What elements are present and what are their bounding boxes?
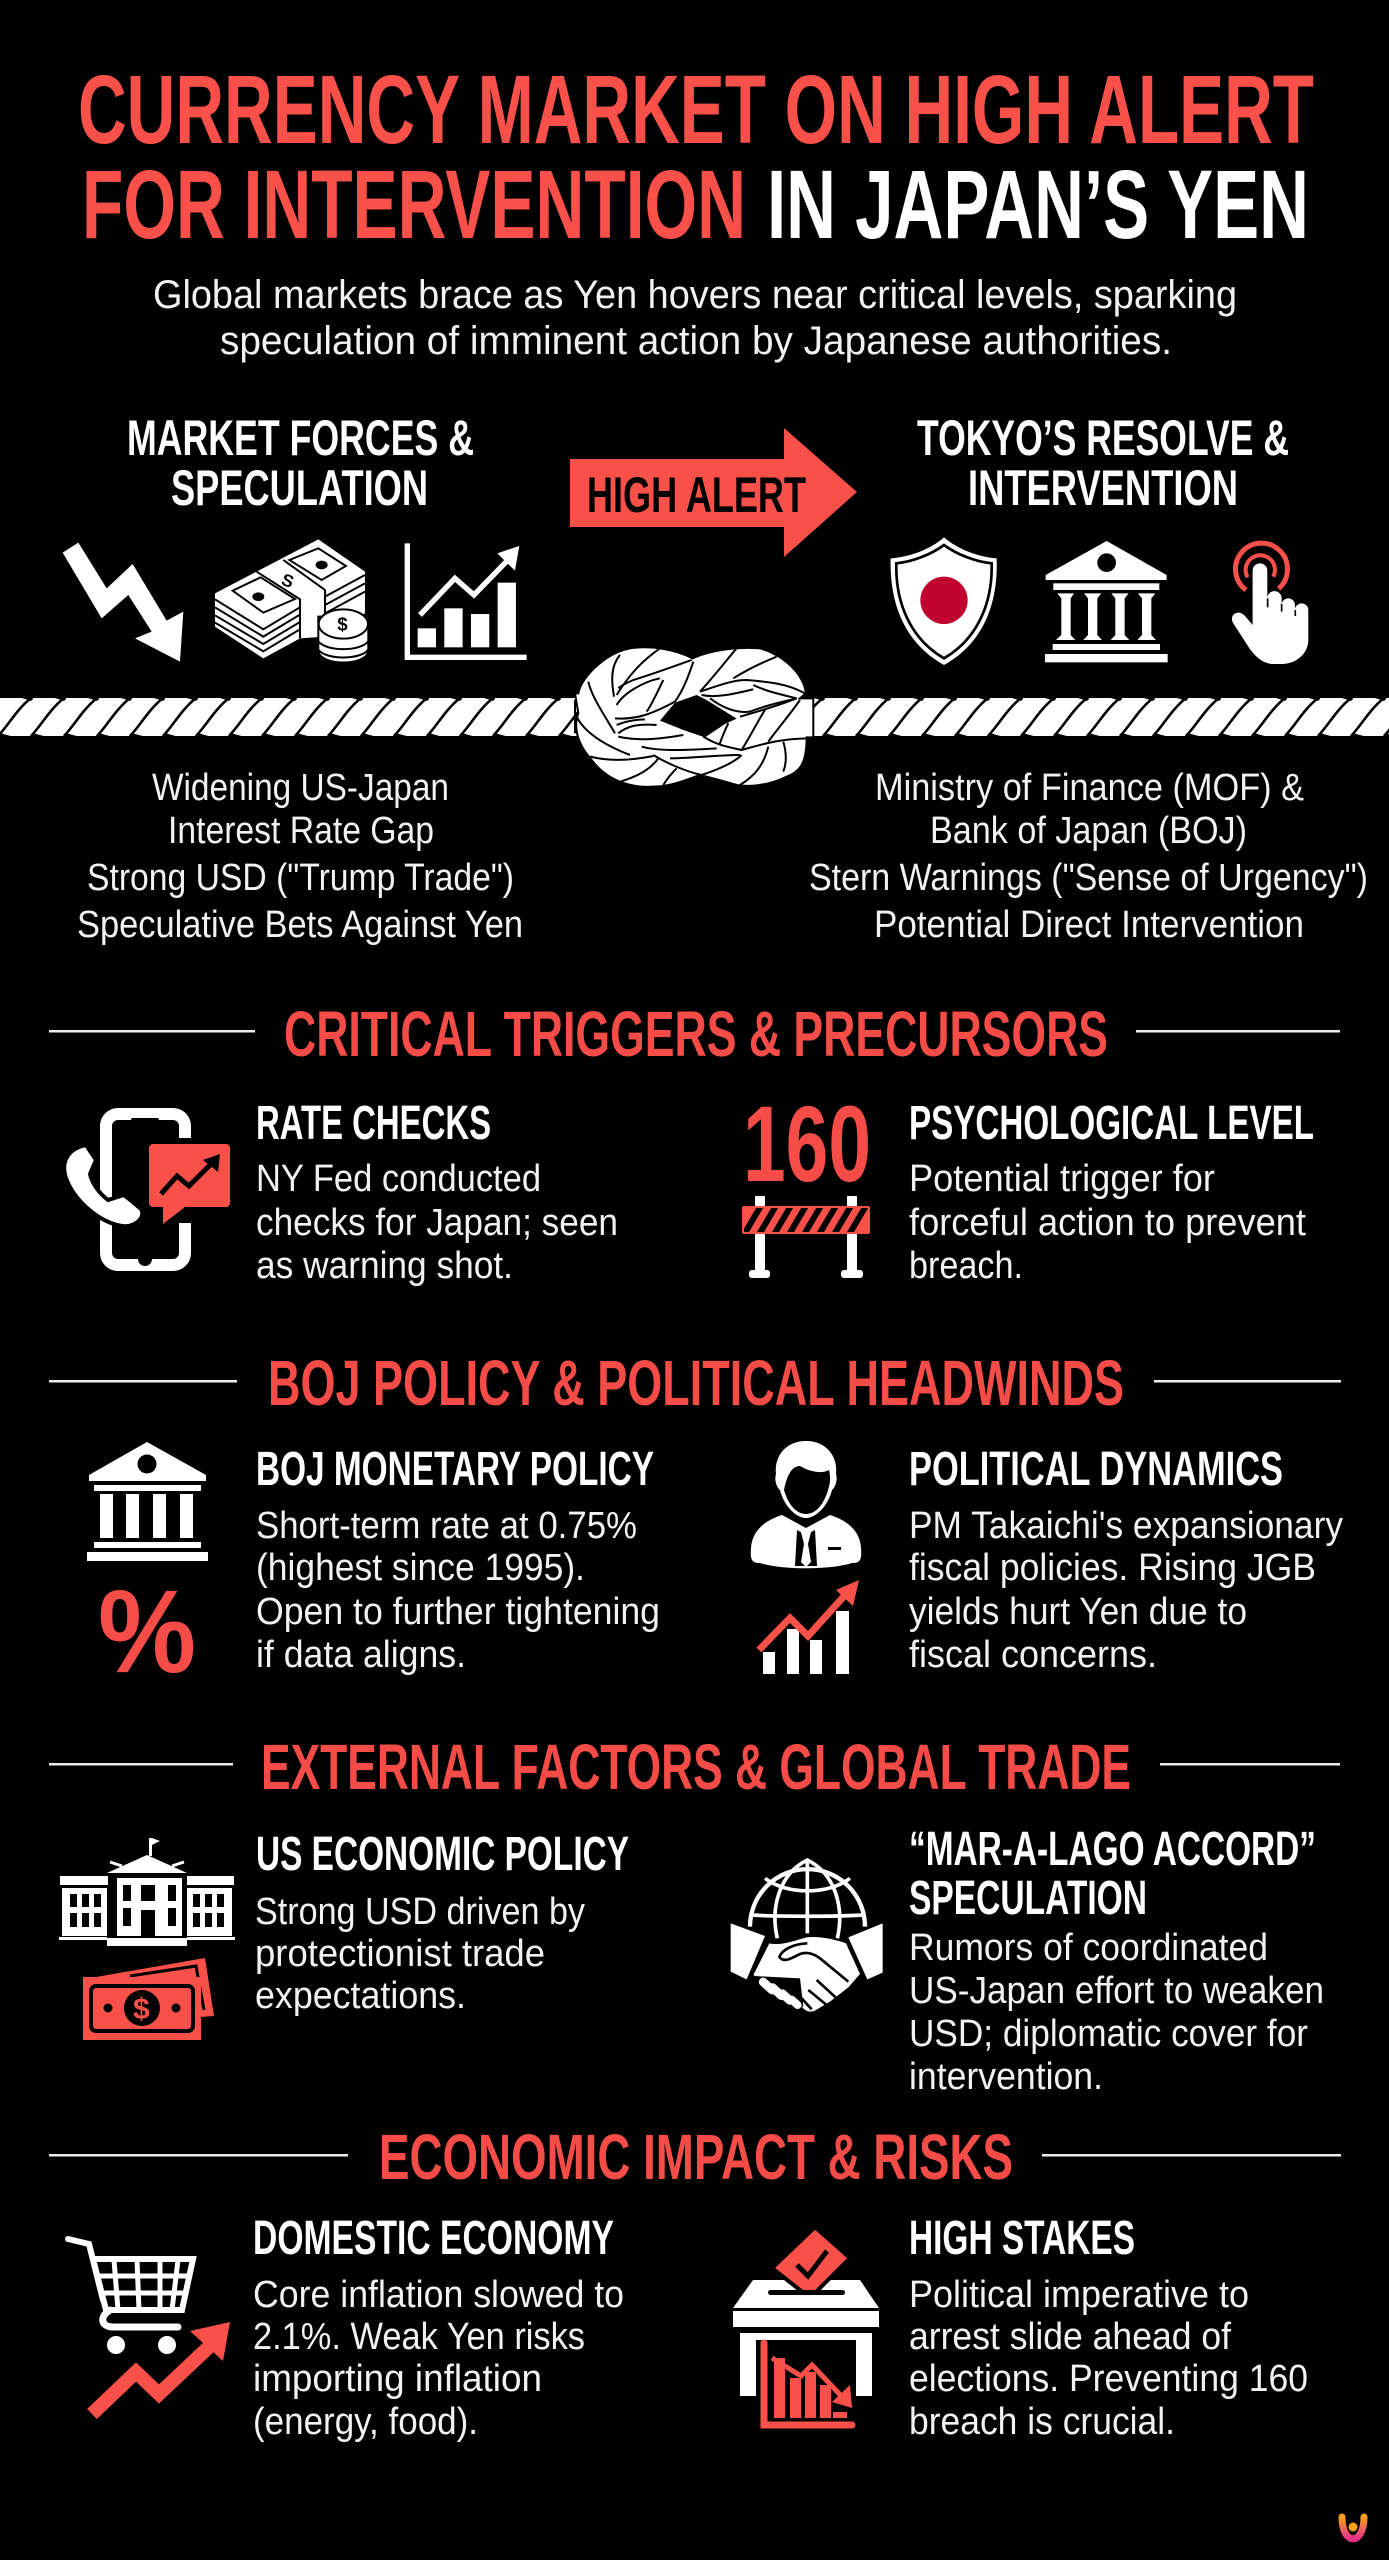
body text: (energy, food). (253, 2401, 478, 2443)
body text: elections. Preventing 160 (909, 2358, 1308, 2400)
panel: rate checks (64, 1097, 618, 1287)
heading: tokyo's resolve: INTERVENTION (968, 460, 1238, 516)
icon: phone with chart bubble (64, 1114, 230, 1266)
body text (256, 1505, 660, 1676)
subtitle: Global markets brace as Yen hovers near critical levels, sparking (153, 273, 1237, 317)
arrow: high alert (570, 428, 857, 557)
heading: US ECONOMIC POLICY (256, 1828, 629, 1881)
icon: rope knot (575, 647, 813, 787)
body text (255, 1891, 585, 2017)
left list (77, 767, 523, 946)
icon: bank and percent: % (98, 1566, 196, 1698)
body text: fiscal policies. Rising JGB (909, 1547, 1316, 1589)
body text: as warning shot. (256, 1245, 513, 1287)
icon: white house and banknotes (59, 1838, 235, 2040)
heading (909, 1823, 1316, 1925)
panel: domestic economy (68, 2212, 624, 2443)
icon: ballot box and falling chart (733, 2227, 879, 2432)
body text: breach is crucial. (909, 2401, 1175, 2443)
body text: Core inflation slowed to (253, 2274, 624, 2316)
heading: BOJ MONETARY POLICY (256, 1443, 654, 1496)
body text: USD; diplomatic cover for (909, 2013, 1308, 2055)
heading: DOMESTIC ECONOMY (253, 2212, 614, 2265)
icon: bank and percent (87, 1442, 208, 1698)
icon: barrier (742, 1196, 870, 1278)
body text: Potential trigger for (909, 1158, 1215, 1200)
body text: PM Takaichi's expansionary (909, 1505, 1343, 1547)
panel: mar-a-lago accord (731, 1823, 1324, 2098)
left list: Strong USD ("Trump Trade") (87, 857, 514, 899)
icon: corner logo (1342, 2517, 1364, 2539)
right list: Bank of Japan (BOJ) (930, 810, 1247, 852)
icon: money stacks: $ (337, 614, 348, 635)
rope (0, 698, 1389, 736)
icon: rising bar chart (407, 543, 527, 657)
icon: white house and banknotes: $ (133, 1993, 150, 2026)
icon: bank building (1045, 541, 1168, 662)
subtitle (153, 273, 1237, 363)
subtitle: speculation of imminent action by Japanese authorities. (220, 319, 1172, 363)
left list: Speculative Bets Against Yen (77, 904, 523, 946)
body text: (highest since 1995). (256, 1547, 585, 1589)
body text (909, 1927, 1324, 2098)
arrow: high alert: HIGH ALERT (587, 467, 806, 523)
icon: shopping cart and red arrow (68, 2239, 230, 2414)
right list (809, 767, 1368, 946)
icon: pressing hand (1232, 543, 1308, 664)
body text (909, 2274, 1308, 2443)
icon: money stacks (215, 539, 368, 662)
panel: boj monetary policy (87, 1442, 660, 1698)
heading: SPECULATION (909, 1872, 1147, 1925)
heading: market forces: SPECULATION (171, 460, 428, 516)
panel: political dynamics (751, 1441, 1343, 1676)
panel: high stakes (733, 2212, 1308, 2443)
body text: expectations. (255, 1975, 466, 2017)
body text (909, 1505, 1343, 1676)
body text (253, 2274, 624, 2443)
heading: RATE CHECKS (256, 1097, 491, 1150)
body text: NY Fed conducted (256, 1158, 541, 1200)
title: FOR INTERVENTION (82, 150, 746, 259)
icon: politician and rising chart (751, 1441, 861, 1674)
body text: fiscal concerns. (909, 1634, 1157, 1676)
body text: checks for Japan; seen (256, 1202, 618, 1244)
body text: importing inflation (253, 2358, 542, 2400)
body text: breach. (909, 1245, 1023, 1287)
icon: money stacks: S (279, 569, 297, 592)
body text: Political imperative to (909, 2274, 1249, 2316)
body text: US-Japan effort to weaken (909, 1970, 1324, 2012)
panel: us economic policy (59, 1828, 629, 2040)
body text: 2.1%. Weak Yen risks (253, 2316, 585, 2358)
body text: Open to further tightening (256, 1591, 660, 1633)
right list: Ministry of Finance (MOF) & (875, 767, 1304, 809)
body text: Strong USD driven by (255, 1891, 585, 1933)
body text: Rumors of coordinated (909, 1927, 1268, 1969)
heading: market forces: MARKET FORCES & (127, 410, 474, 466)
body text (256, 1158, 618, 1287)
icon: globe and handshake (731, 1860, 883, 2012)
panel: psychological level (742, 1106, 1313, 1278)
left list: Widening US-Japan (152, 767, 449, 809)
number 160: 160 (743, 1083, 871, 1204)
heading: HIGH STAKES (909, 2212, 1135, 2265)
left list: Interest Rate Gap (168, 810, 434, 852)
body text: if data aligns. (256, 1634, 466, 1676)
body text: protectionist trade (255, 1933, 545, 1975)
section heading: economic impact: ECONOMIC IMPACT & RISKS (379, 2121, 1013, 2193)
body text: arrest slide ahead of (909, 2316, 1231, 2358)
icon: falling lightning arrow (63, 543, 183, 662)
body text: forceful action to prevent (909, 1202, 1306, 1244)
icon: japan shield (891, 537, 997, 665)
body text (909, 1158, 1306, 1287)
body text: yields hurt Yen due to (909, 1591, 1247, 1633)
body text: Short-term rate at 0.75% (256, 1505, 637, 1547)
right list: Potential Direct Intervention (874, 904, 1304, 946)
heading: tokyo's resolve (917, 410, 1289, 516)
heading: market forces (127, 410, 474, 516)
body text: intervention. (909, 2056, 1103, 2098)
title (78, 55, 1314, 259)
